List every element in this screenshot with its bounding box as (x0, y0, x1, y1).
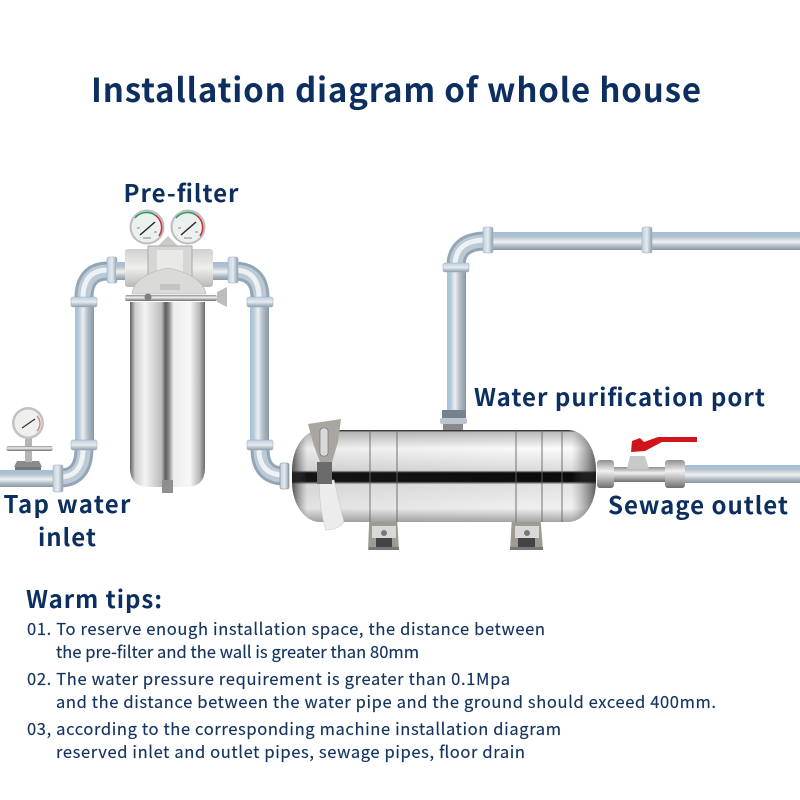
tip 02: 02. The water pressure requirement is greater than 0.1Mpa (27, 666, 510, 690)
icon: inlet pressure gauge (6, 407, 53, 470)
sewage valve and pipe (597, 437, 800, 488)
heading: warm tips: Warm tips: (26, 580, 162, 615)
tip 02 (27, 666, 716, 713)
tip 01: the pre-filter and the wall is greater than 80mm (56, 639, 419, 663)
title: Installation diagram of whole house (91, 64, 701, 112)
tank clamp (308, 419, 344, 530)
tip 03: 03, according to the corresponding machine installation diagram (27, 716, 561, 740)
feet (368, 500, 543, 550)
tip 02: and the distance between the water pipe and the ground should exceed 400mm. (56, 689, 716, 713)
inlet pipe assembly (0, 257, 128, 492)
purified water pipe (440, 227, 800, 431)
tip 03: reserved inlet and outlet pipes, sewage pipes, floor drain (56, 739, 525, 763)
icon: pressure gauge left (130, 210, 164, 244)
icon: red valve handle (631, 437, 697, 452)
stainless steel tank (292, 419, 596, 530)
pre-filter housing (125, 210, 227, 493)
label: water purification port: Water purification port (474, 378, 765, 413)
label: tap water inlet (4, 485, 131, 553)
label: tap water inlet: Tap water (4, 485, 131, 520)
icon: pressure gauge right (170, 210, 206, 244)
tip 01 (27, 616, 545, 663)
label: tap water inlet: inlet (38, 518, 96, 553)
tip 01: 01. To reserve enough installation space, the distance between (27, 616, 545, 640)
outlet pipe from pre-filter to tank (212, 257, 289, 489)
label: pre-filter: Pre-filter (124, 174, 239, 209)
tip 03 (27, 716, 561, 763)
label: sewage outlet: Sewage outlet (608, 486, 788, 521)
